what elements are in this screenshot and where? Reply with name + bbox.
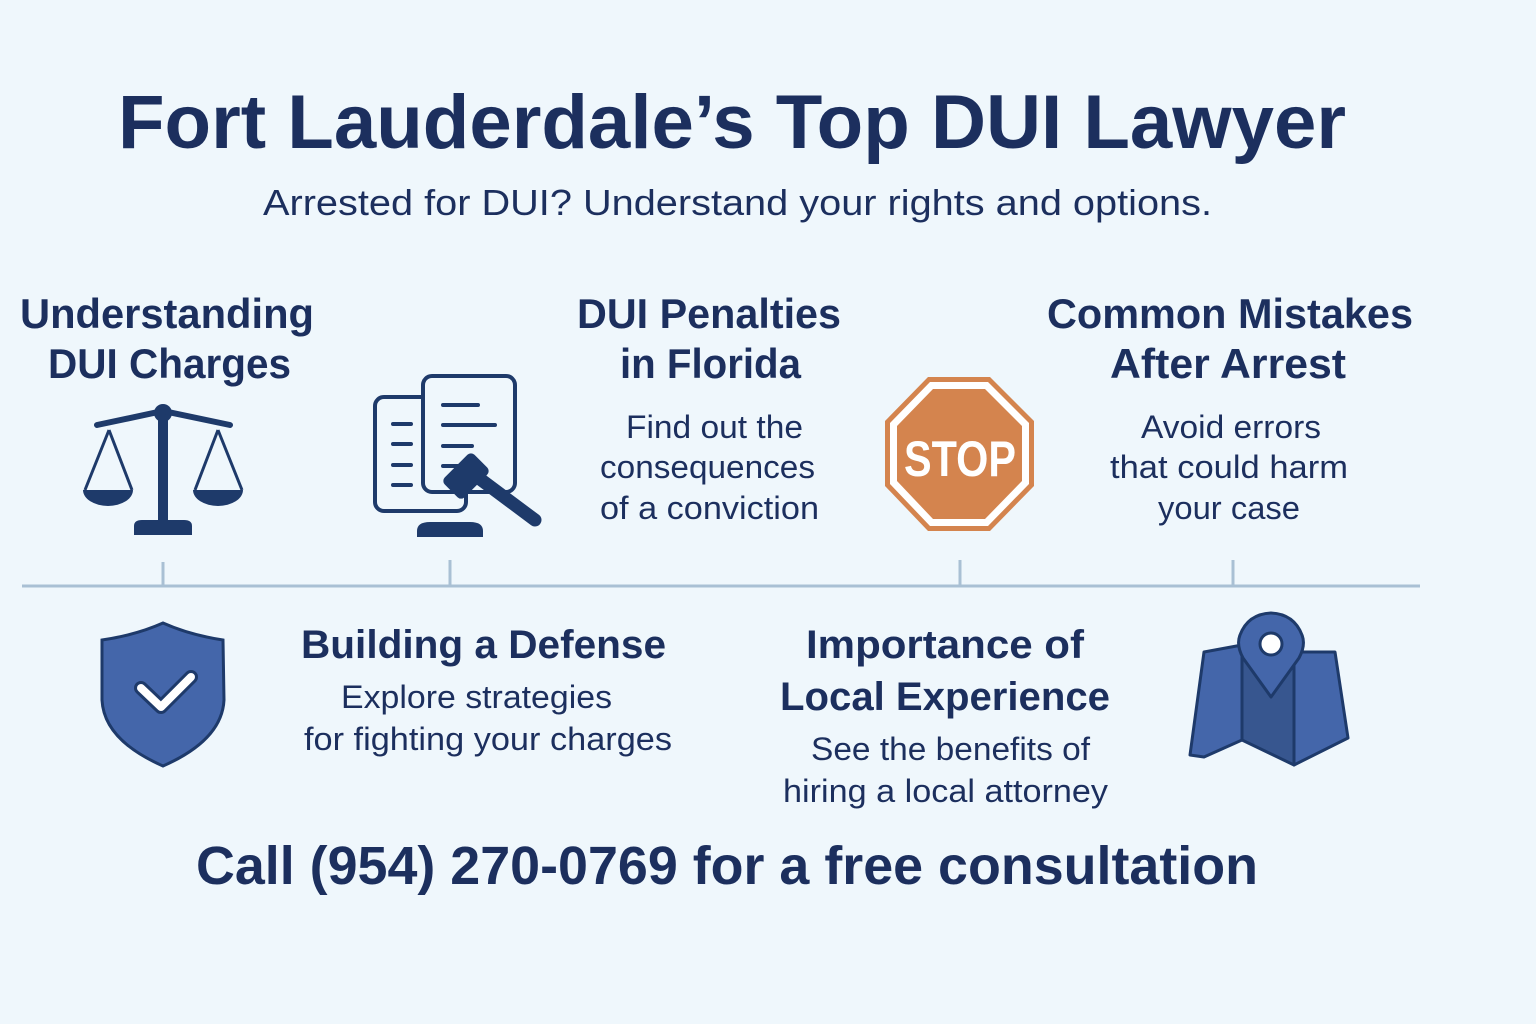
icon: shield with check bbox=[102, 623, 224, 766]
heading: DUI penalties in Florida: DUI Penalties bbox=[577, 290, 841, 337]
icon: stop sign bbox=[885, 377, 1034, 531]
heading: common mistakes after arrest bbox=[1047, 290, 1413, 526]
heading: building a defense: Explore strategies bbox=[341, 679, 612, 715]
icon: scales of justice bbox=[83, 404, 243, 535]
heading: understanding DUI charges: Understanding bbox=[20, 290, 314, 337]
subtitle: Arrested for DUI? Understand your rights and options. bbox=[263, 182, 1212, 223]
heading: building a defense: Building a Defense bbox=[301, 623, 666, 667]
heading: common mistakes after arrest: that could harm bbox=[1110, 449, 1348, 485]
heading: DUI penalties in Florida: consequences bbox=[600, 449, 815, 485]
heading: DUI penalties in Florida bbox=[577, 290, 841, 526]
heading: building a defense bbox=[301, 623, 672, 757]
heading: DUI penalties in Florida: Find out the bbox=[626, 409, 803, 445]
heading: importance of local experience: Local Experience bbox=[780, 675, 1110, 719]
heading: importance of local experience: hiring a local attorney bbox=[783, 773, 1108, 809]
heading: common mistakes after arrest: Avoid errors bbox=[1141, 409, 1321, 445]
icon: map with pin bbox=[1190, 613, 1348, 765]
heading: understanding DUI charges bbox=[20, 290, 314, 387]
heading: building a defense: for fighting your charges bbox=[304, 721, 672, 757]
icon: stop sign: STOP bbox=[904, 431, 1016, 487]
heading: common mistakes after arrest: Common Mistakes bbox=[1047, 290, 1413, 337]
heading: common mistakes after arrest: your case bbox=[1158, 490, 1300, 526]
heading: understanding DUI charges: DUI Charges bbox=[48, 340, 291, 387]
call to action: Call (954) 270-0769 for a free consultation bbox=[196, 836, 1258, 896]
title: Fort Lauderdale’s Top DUI Lawyer bbox=[118, 80, 1346, 165]
heading: DUI penalties in Florida: of a conviction bbox=[600, 490, 819, 526]
timeline bbox=[22, 560, 1420, 586]
heading: importance of local experience: See the benefits of bbox=[811, 731, 1090, 767]
heading: DUI penalties in Florida: in Florida bbox=[620, 340, 802, 387]
icon: documents and gavel bbox=[375, 376, 535, 537]
heading: importance of local experience: Importance of bbox=[806, 623, 1085, 667]
heading: importance of local experience bbox=[780, 623, 1110, 809]
heading: common mistakes after arrest: After Arrest bbox=[1110, 340, 1346, 387]
